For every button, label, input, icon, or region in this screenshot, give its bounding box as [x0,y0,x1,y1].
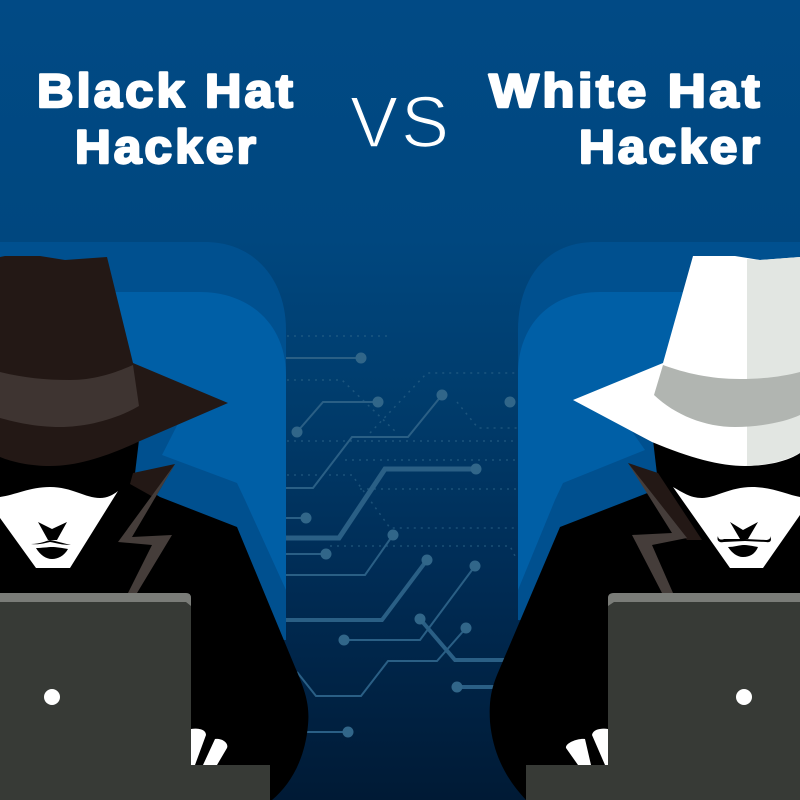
hat band [654,365,800,427]
panel: left blue backdrop [0,242,286,640]
title: VS: VS [350,83,449,163]
title: White Hat Hacker: White Hat [489,64,763,117]
face mask [0,487,118,568]
body [490,480,800,800]
title: White Hat Hacker [489,64,763,173]
laptop [526,593,800,800]
laptop logo [44,689,60,705]
collar [130,464,175,498]
collar [628,463,702,540]
fingers [566,729,608,765]
face: nose, mustache, lips [31,522,71,559]
hat [0,256,228,466]
collar lightning [118,464,175,593]
face: nose, mustache, lips [717,522,771,557]
white hat hacker figure [490,256,800,800]
fingers [191,729,227,765]
laptop top edge [0,593,191,606]
hat shaded side [747,257,800,466]
head [0,440,139,570]
circuit board [286,336,517,738]
head [653,440,800,570]
hat band [0,365,139,427]
hat [573,256,800,466]
black hat hacker figure [0,256,308,800]
title: White Hat Hacker: Hacker [579,120,763,173]
title: Black Hat Hacker [37,64,296,173]
panel: right blue backdrop [518,242,800,640]
body [0,480,308,800]
laptop [0,593,270,800]
laptop logo [736,689,752,705]
laptop top edge [608,593,800,606]
title: Black Hat Hacker: Black Hat [37,64,296,117]
collar lightning [628,463,687,593]
title: Black Hat Hacker: Hacker [75,120,259,173]
face mask [673,487,800,568]
